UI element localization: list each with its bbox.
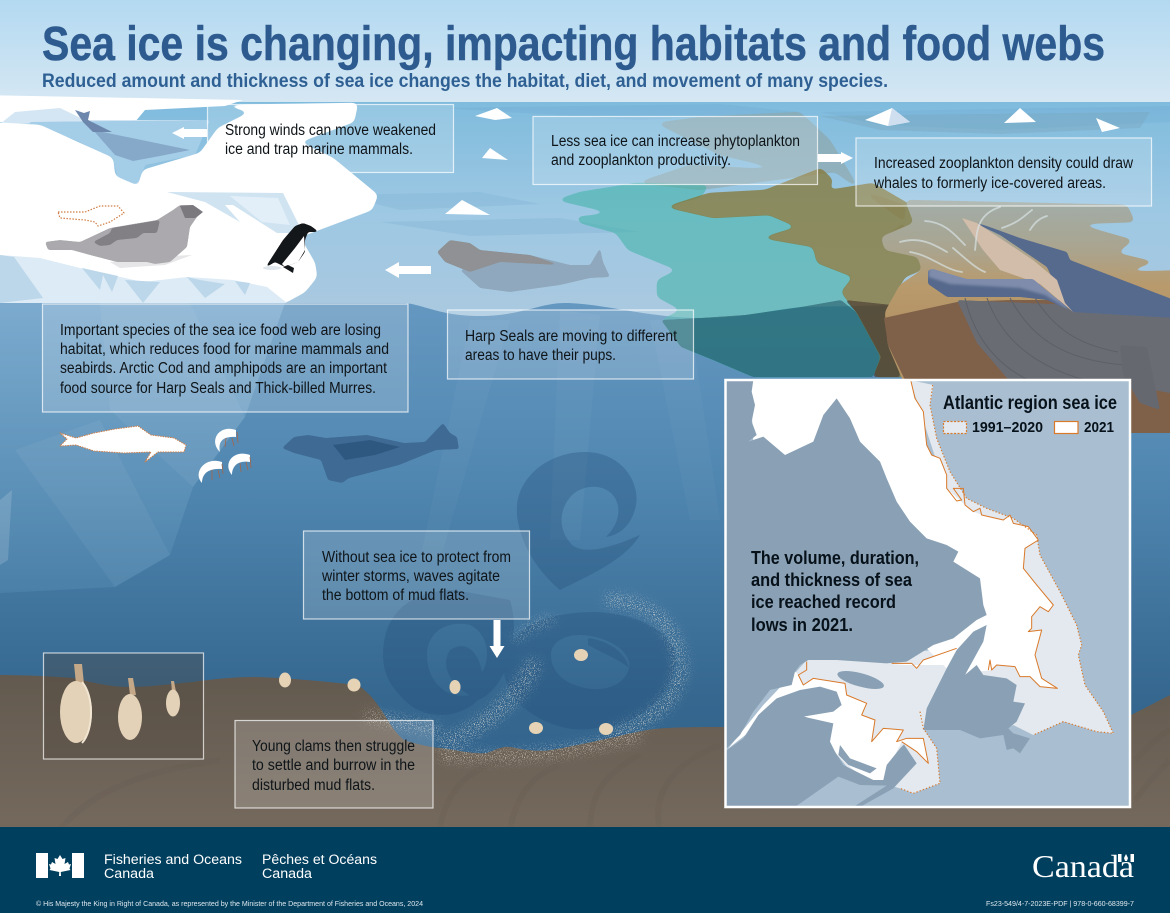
teal bloom below waterline xyxy=(661,300,881,377)
arrow: seal moving left xyxy=(385,262,431,278)
zooplankton bloom: tan layer xyxy=(881,200,1170,420)
department name English: Canada xyxy=(104,866,155,881)
2021 solid outline xyxy=(798,380,1057,763)
callout: harp seals: areas to have their pups. xyxy=(465,347,616,364)
callout: young clams: disturbed mud flats. xyxy=(252,777,375,794)
callout: strong winds: Strong winds can move weakened xyxy=(225,122,436,139)
Bay of Fundy tint xyxy=(795,777,887,807)
whale throat grooves xyxy=(965,298,1125,385)
department name French xyxy=(262,852,377,881)
background: sky band xyxy=(0,0,1170,102)
Prince Edward Island xyxy=(838,745,877,773)
subtitle: Reduced amount and thickness of sea ice changes the habitat, diet, and movement of many species. xyxy=(42,70,888,92)
haze near icebergs xyxy=(820,112,1150,134)
arrow: plankton to whales xyxy=(818,152,853,164)
whale upper jaw xyxy=(962,217,1170,319)
map legend: 1991–2020 xyxy=(972,419,1043,436)
copyright line: © His Majesty the King in Right of Canada, as represented by the Minister of the Department of Fisheries and Oceans, 2024 xyxy=(36,899,423,908)
ice shading facets xyxy=(167,192,303,233)
callout: strong winds xyxy=(208,104,454,172)
2021 ice north shore strip xyxy=(894,656,943,668)
open-water pool with trapped mammal xyxy=(25,120,210,186)
callout: food web: Important species of the sea ice food web are losing xyxy=(60,322,381,339)
callout: winter storms xyxy=(304,531,530,619)
sea floor xyxy=(0,675,1170,830)
arrow: waves downward xyxy=(490,620,504,658)
whale fin xyxy=(1120,345,1160,410)
map border xyxy=(726,380,1130,807)
phytoplankton bloom: haze layer xyxy=(636,112,905,240)
map panel xyxy=(724,379,1131,808)
1991-2020 ice extent xyxy=(793,380,1113,793)
tan bloom below waterline xyxy=(884,300,1170,433)
callout: winter storms: Without sea ice to protect from xyxy=(322,549,511,566)
map legend xyxy=(944,419,1114,436)
olive bloom below waterline xyxy=(845,300,900,377)
Newfoundland land xyxy=(923,625,1030,753)
department name French: Pêches et Océans xyxy=(262,852,377,867)
callout: harp seals xyxy=(448,310,694,379)
map callout: lows in 2021. xyxy=(751,615,853,635)
Maritimes land xyxy=(725,687,917,807)
pale ice facet xyxy=(230,196,290,225)
main ice floe xyxy=(0,103,378,303)
sea surface streaks xyxy=(340,104,1170,236)
icon: thick-billed murre xyxy=(263,223,319,273)
callout: zooplankton density xyxy=(856,138,1152,206)
department name English xyxy=(104,852,242,881)
callout: strong winds: ice and trap marine mammals. xyxy=(225,141,413,158)
department name French: Canada xyxy=(262,866,313,881)
icon: medium clam xyxy=(118,678,142,740)
far ice strip xyxy=(0,95,243,122)
callout: young clams: to settle and burrow in the xyxy=(252,757,415,774)
icon: amphipods xyxy=(199,429,251,483)
Anticosti Island xyxy=(837,671,884,689)
icon: small clam xyxy=(166,681,180,716)
ice wall facets xyxy=(0,255,250,303)
icon: arctic cod xyxy=(60,426,186,462)
footer xyxy=(0,827,1170,913)
underwater light rays xyxy=(420,310,720,560)
arrow: ice moves left xyxy=(172,127,207,139)
trapped whale shadow xyxy=(75,110,190,161)
Quebec and Labrador land xyxy=(725,380,987,750)
whale xyxy=(928,217,1170,410)
map callout: and thickness of sea xyxy=(751,570,913,590)
callout: phytoplankton: and zooplankton productivity. xyxy=(551,152,731,169)
water swirl lines near whale xyxy=(900,207,1047,272)
callout: winter storms: the bottom of mud flats. xyxy=(322,587,469,604)
callout: phytoplankton xyxy=(533,116,818,184)
1991-2020 dotted outline xyxy=(900,385,1113,793)
callout: food web: habitat, which reduces food for marine mammals and xyxy=(60,341,389,358)
sea floor ripples xyxy=(60,730,1170,830)
icon: harp seal swimming underwater xyxy=(282,423,459,483)
icon: seal pup outline xyxy=(58,206,124,226)
map callout: ice reached record xyxy=(751,592,896,612)
sediment cloud xyxy=(365,600,680,757)
submerged iceberg xyxy=(0,303,285,593)
whale lower jaw xyxy=(928,269,1073,312)
whale body xyxy=(957,300,1170,394)
map callout: The volume, duration, xyxy=(751,548,919,568)
callout: young clams xyxy=(235,720,433,808)
2021 ice extent gulf xyxy=(728,672,928,785)
callout: food web xyxy=(42,304,408,412)
ice wall xyxy=(0,255,287,303)
storm wave swirls xyxy=(383,452,676,729)
icon: Canadian flag xyxy=(36,853,84,878)
callout: food web: seabirds. Arctic Cod and amphipods are an important xyxy=(60,360,388,377)
far ice facets xyxy=(0,108,205,124)
phytoplankton bloom: teal layer xyxy=(556,183,881,377)
map legend: 2021 xyxy=(1084,419,1114,436)
callout: harp seals: Harp Seals are moving to different xyxy=(465,328,678,345)
callout: food web: food source for Harp Seals and Thick-billed Murres. xyxy=(60,380,376,397)
department name English: Fisheries and Oceans xyxy=(104,852,242,867)
small icebergs on surface xyxy=(445,108,1120,215)
catalogue numbers: Fs23-549/4-7-2023E-PDF | 978-0-660-68399-7 xyxy=(986,899,1134,908)
icon: drifting clams xyxy=(279,649,613,735)
map callout xyxy=(751,548,919,635)
underwater column xyxy=(0,300,1170,830)
ice floes xyxy=(0,95,378,303)
icon: harp seal swimming at surface xyxy=(437,240,610,292)
2021 ice extent north xyxy=(750,380,1057,688)
callout: zooplankton density: Increased zooplankton density could draw xyxy=(874,155,1134,172)
icon: harp seal on ice xyxy=(45,205,203,268)
icon: large clam xyxy=(60,664,92,743)
map heading: Atlantic region sea ice xyxy=(943,393,1117,414)
Canada wordmark: Canada xyxy=(1032,848,1134,884)
callout: young clams: Young clams then struggle xyxy=(252,738,415,755)
callout: phytoplankton: Less sea ice can increase phytoplankton xyxy=(551,133,800,150)
panel: clams inset xyxy=(44,653,204,759)
callout: zooplankton density: whales to formerly ice-covered areas. xyxy=(873,175,1106,192)
whale baleen xyxy=(962,218,1073,312)
zooplankton bloom: olive layer xyxy=(665,168,922,377)
background: sea surface xyxy=(0,102,1170,342)
map geography xyxy=(725,380,1129,807)
callout: winter storms: winter storms, waves agitate xyxy=(321,568,500,585)
